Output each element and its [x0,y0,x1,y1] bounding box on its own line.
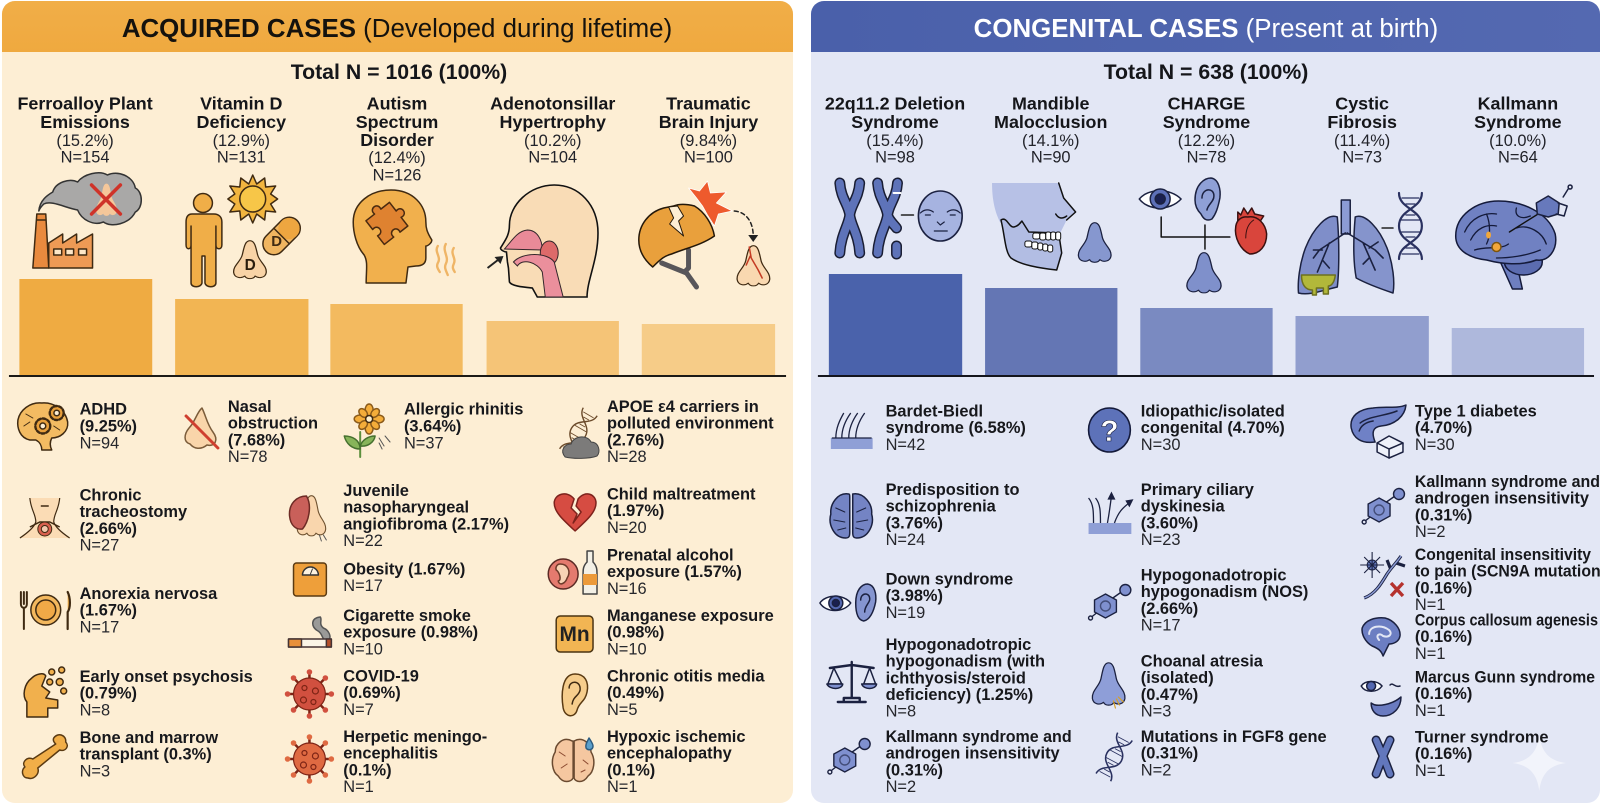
icon: marcus gunn eye and mouth [1361,682,1401,716]
icon: head cross-section with airway [488,185,598,297]
label: kallmann syndrome: N=64 [1498,148,1538,167]
item: prenatal alcohol exposure [607,546,742,598]
header band: congenital [811,1,1600,52]
icon: nose with atresia mark [1092,663,1125,708]
item: allergic rhinitis: Allergic rhinitis [404,400,523,419]
icon: plate with fork and knife [21,592,70,629]
item: hypoxic ischemic encephalopathy: N=1 [607,778,637,796]
item: corpus callosum agenesis: (0.16%) [1415,628,1472,646]
title: congenital cases: CONGENITAL CASES (Present at birth) [974,15,1438,43]
item: kallmann and androgen insensitivity upper: N=2 [1415,523,1445,541]
icon: herpes virus [285,734,334,784]
label: traumatic brain injury: Traumatic [666,93,751,114]
watermark sparkle [1512,735,1566,791]
item: type 1 diabetes: (4.70%) [1415,419,1472,437]
item: hypoxic ischemic encephalopathy [607,728,745,796]
item: kallmann and androgen insensitivity lower: N=2 [886,778,916,796]
item: down syndrome: N=19 [886,604,925,622]
item: predisposition to schizophrenia [886,481,1019,549]
item: herpetic meningo-encephalitis: N=1 [343,778,374,796]
item: predisposition to schizophrenia: schizophrenia [886,498,997,516]
label: mandible malocclusion [994,93,1107,167]
item: early onset psychosis: (0.79%) [80,685,137,703]
item: hypoxic ischemic encephalopathy: encephalopathy [607,745,733,763]
panel: congenital cases [811,1,1600,803]
item: chronic otitis media: N=5 [607,701,637,719]
total: congenital: Total N = 638 (100%) [1104,60,1308,84]
item: obesity: Obesity (1.67%) [343,560,465,579]
label: vitamin d deficiency [197,93,286,167]
item: turner syndrome [1415,728,1549,780]
icon: flower with pollen [344,404,390,457]
item: chronic tracheostomy: Chronic [80,486,142,505]
icon: dna with pollution cloud [560,408,599,458]
label: autism spectrum disorder [356,93,438,185]
item: child maltreatment: Child maltreatment [607,485,756,504]
label: adenotonsillar hypertrophy: (10.2%) [524,132,581,150]
item: juvenile nasopharyngeal angiofibroma: angiofibroma (2.17%) [343,515,509,533]
item: herpetic meningo-encephalitis: Herpetic meningo- [343,728,487,746]
label: kallmann syndrome: (10.0%) [1489,132,1547,150]
item: marcus gunn syndrome [1415,668,1595,720]
label: mandible malocclusion: N=90 [1031,148,1071,167]
congenital panel contents [818,15,1600,796]
item: hypogonadotropic hypogonadism with ichthyosis: ichthyosis/steroid [886,669,1026,687]
item: bardet-biedl syndrome [886,402,1026,454]
bar chart: congenital top five [818,274,1594,377]
item: chronic otitis media [607,667,765,719]
icon: jaw profile and nose [992,183,1111,270]
item: herpetic meningo-encephalitis: encephalitis [343,745,438,763]
icon: person, sun, pill and nose [186,175,305,287]
item: chronic otitis media: Chronic otitis media [607,667,765,686]
item: kallmann and androgen insensitivity upper: androgen insensitivity [1415,490,1590,508]
title: acquired cases: ACQUIRED CASES (Developed during lifetime) [122,15,672,43]
label: cystic fibrosis: Cystic [1335,93,1389,114]
item: chronic otitis media: (0.49%) [607,684,664,702]
icon: factory with smoke cloud and crossed nose [33,173,141,268]
label: charge syndrome: Syndrome [1163,112,1250,132]
item: corpus callosum agenesis [1415,611,1598,663]
icon: question mark circle [1089,408,1130,452]
item: child maltreatment: N=20 [607,519,647,537]
item: type 1 diabetes: Type 1 diabetes [1415,402,1537,421]
label: ferroalloy plant emissions: N=154 [61,148,109,167]
label: traumatic brain injury: N=100 [684,148,733,167]
item: idiopathic isolated congenital: Idiopathic/isolated [1141,402,1285,421]
item: choanal atresia: N=3 [1141,703,1171,721]
item: hypogonadotropic hypogonadism nos: N=17 [1141,617,1180,635]
icon: broken heart [554,494,596,531]
icon: cracked helmet, impact and injured nose [639,181,770,287]
item: type 1 diabetes [1415,402,1537,454]
icon: covid-19 virus [285,669,334,719]
item: hypogonadotropic hypogonadism nos: hypogonadism (NOS) [1141,583,1308,601]
icon: cilia with arrows [1089,493,1132,534]
item: adhd [80,400,137,453]
icon: eye and ear [820,584,876,621]
label: mandible malocclusion: Mandible [1012,93,1090,114]
icon: person, sun, pill and nose: D [245,257,256,274]
label: 22q11.2 deletion syndrome: 22q11.2 Deletion [825,93,965,114]
icon: bone [22,735,67,778]
icon: head with puzzle piece [353,190,455,283]
item: hypoxic ischemic encephalopathy: Hypoxic ischemic [607,728,745,746]
label: 22q11.2 deletion syndrome: N=98 [875,148,915,167]
item: hypogonadotropic hypogonadism with ichthyosis: Hypogonadotropic [886,636,1031,654]
label: 22q11.2 deletion syndrome [825,93,965,167]
total: acquired: Total N = 1016 (100%) [291,60,507,84]
item: bone and marrow transplant: N=3 [80,762,110,780]
item: chronic tracheostomy: N=27 [80,537,119,555]
icon: charge eye, ear, heart, nose [1139,178,1267,293]
item: kallmann and androgen insensitivity upper: (0.31%) [1415,506,1472,524]
item: allergic rhinitis [404,400,523,453]
item: nasal obstruction [228,398,318,466]
item: congenital insensitivity to pain: Congenital insensitivity [1415,546,1592,564]
label: vitamin d deficiency: N=131 [217,148,266,167]
item: bardet-biedl syndrome: N=42 [886,436,925,454]
item: apoe e4 carriers: polluted environment [607,415,774,433]
label: 22q11.2 deletion syndrome: (15.4%) [866,132,924,150]
icon: chromosomes and face [840,183,962,254]
item: bone and marrow transplant: transplant (0.3%) [80,746,212,764]
item: congenital insensitivity to pain: N=1 [1415,596,1445,614]
item: adhd: ADHD [80,400,127,419]
item: hypogonadotropic hypogonadism nos: (2.66%) [1141,600,1198,618]
item: congenital insensitivity to pain [1415,546,1600,614]
icon: lungs with mucus and dna [1298,193,1422,295]
item: primary ciliary dyskinesia: dyskinesia [1141,498,1225,516]
label: traumatic brain injury: Brain Injury [659,112,758,132]
item: primary ciliary dyskinesia: (3.60%) [1141,514,1198,532]
item: apoe e4 carriers: (2.76%) [607,431,664,449]
label: ferroalloy plant emissions: (15.2%) [56,132,114,150]
item: bardet-biedl syndrome: syndrome (6.58%) [886,419,1026,437]
item: nasal obstruction: (7.68%) [228,431,285,449]
icon: manganese tile: Mn [560,623,590,646]
item: mutations in fgf8 gene: Mutations in FGF8 gene [1141,728,1327,746]
item: prenatal alcohol exposure: Prenatal alcohol [607,546,734,565]
label: charge syndrome: (12.2%) [1178,132,1235,150]
icon: ear [562,674,588,716]
item: covid-19: N=7 [343,701,374,719]
item: marcus gunn syndrome: N=1 [1415,702,1445,720]
label: ferroalloy plant emissions [17,93,153,167]
item: juvenile nasopharyngeal angiofibroma: nasopharyngeal [343,499,469,517]
item: hypogonadotropic hypogonadism with ichthyosis [886,636,1045,721]
label: adenotonsillar hypertrophy: N=104 [528,148,577,167]
label: autism spectrum disorder: Spectrum [356,112,438,132]
item: kallmann and androgen insensitivity lower: (0.31%) [886,761,943,779]
icon: brain with gears [18,403,68,450]
item: apoe e4 carriers [607,398,774,466]
item: allergic rhinitis: (3.64%) [404,418,461,436]
item: early onset psychosis [80,668,253,719]
item: turner syndrome: (0.16%) [1415,745,1472,763]
item: manganese exposure [607,607,774,658]
item: predisposition to schizophrenia: Predisposition to [886,481,1019,499]
item: kallmann and androgen insensitivity lower: androgen insensitivity [886,745,1061,763]
item: juvenile nasopharyngeal angiofibroma: Juvenile [343,482,409,500]
label: autism spectrum disorder: Disorder [360,130,434,150]
item: chronic tracheostomy: tracheostomy [80,503,188,521]
item: hypogonadotropic hypogonadism with ichthyosis: hypogonadism (with [886,653,1045,671]
item: juvenile nasopharyngeal angiofibroma: N=22 [343,532,383,550]
item: primary ciliary dyskinesia: N=23 [1141,531,1180,549]
icon: embryo and alcohol bottle [548,551,597,594]
item: kallmann and androgen insensitivity lower: Kallmann syndrome and [886,728,1072,746]
label: charge syndrome: N=78 [1187,148,1226,167]
label: vitamin d deficiency: Vitamin D [200,93,282,114]
item: marcus gunn syndrome: (0.16%) [1415,685,1472,703]
item: nasal obstruction: N=78 [228,448,268,466]
item: hypoxic ischemic encephalopathy: (0.1%) [607,761,655,779]
icon: head with psychosis fragments [24,667,67,717]
icon: pancreas and cube [1351,405,1406,458]
list: acquired other causes [80,398,774,796]
label: kallmann syndrome: Syndrome [1474,112,1562,132]
item: obesity: N=17 [343,577,383,595]
label: ferroalloy plant emissions: Emissions [40,112,130,132]
icon: cigarette with smoke [289,617,331,647]
item: down syndrome [886,570,1013,622]
item: obesity [343,560,465,595]
icon: person, sun, pill and nose: D [271,233,282,250]
item: anorexia nervosa: Anorexia nervosa [80,585,218,603]
item: anorexia nervosa: N=17 [80,618,119,636]
item: cigarette smoke exposure: N=10 [343,640,383,658]
item: choanal atresia: Choanal atresia [1141,652,1264,671]
icon: bathroom scale [294,563,326,596]
item: bone and marrow transplant [80,729,218,780]
item: child maltreatment [607,485,756,537]
item: prenatal alcohol exposure: exposure (1.57%) [607,563,742,581]
item: turner syndrome: N=1 [1415,762,1445,780]
item: apoe e4 carriers: N=28 [607,448,647,466]
item: predisposition to schizophrenia: (3.76%) [886,514,943,532]
item: covid-19: (0.69%) [343,684,401,702]
item: manganese exposure: Manganese exposure [607,607,774,625]
icon: molecule middle [1089,584,1131,620]
item: adhd: N=94 [80,434,119,453]
label: vitamin d deficiency: Deficiency [197,112,286,132]
item: anorexia nervosa [80,585,218,636]
item: hypogonadotropic hypogonadism nos [1141,566,1308,635]
label: autism spectrum disorder: N=126 [373,166,421,185]
item: prenatal alcohol exposure: N=16 [607,580,647,598]
item: covid-19 [343,667,419,719]
item: mutations in fgf8 gene: (0.31%) [1141,745,1198,763]
item: kallmann and androgen insensitivity upper [1415,473,1600,541]
item: allergic rhinitis: N=37 [404,434,444,453]
label: ferroalloy plant emissions: Ferroalloy Plant [17,93,153,114]
item: mutations in fgf8 gene [1141,728,1327,779]
item: cigarette smoke exposure [343,607,478,658]
item: idiopathic isolated congenital [1141,402,1285,454]
item: hypogonadotropic hypogonadism with ichthyosis: N=8 [886,703,916,721]
list: congenital other causes [886,402,1600,796]
icon: brain with water drop [552,738,594,782]
label: 22q11.2 deletion syndrome: Syndrome [851,112,939,132]
icon: manganese tile [556,616,593,652]
item: hypogonadotropic hypogonadism nos: Hypogonadotropic [1141,566,1287,585]
label: kallmann syndrome: Kallmann [1478,93,1558,114]
item: chronic tracheostomy [80,486,188,555]
label: traumatic brain injury: (9.84%) [680,132,737,150]
item: choanal atresia [1141,652,1264,721]
item: kallmann and androgen insensitivity lower [886,728,1072,796]
label: autism spectrum disorder: Autism [367,93,427,114]
item: covid-19: COVID-19 [343,667,419,686]
label: charge syndrome: CHARGE [1168,93,1245,114]
label: adenotonsillar hypertrophy: Hypertrophy [500,112,606,132]
item: adhd: (9.25%) [80,418,137,436]
item: idiopathic isolated congenital: congenital (4.70%) [1141,419,1285,437]
item: idiopathic isolated congenital: N=30 [1141,436,1180,454]
icon: nasal obstruction [185,408,218,448]
item: bardet-biedl syndrome: Bardet-Biedl [886,402,983,421]
icon: brain with molecule [1456,185,1572,289]
label: cystic fibrosis: (11.4%) [1334,132,1390,150]
item: herpetic meningo-encephalitis [343,728,487,796]
item: anorexia nervosa: (1.67%) [80,602,137,620]
item: down syndrome: (3.98%) [886,587,943,605]
item: manganese exposure: N=10 [607,640,647,658]
icon: dna helix [1096,733,1132,781]
item: chronic tracheostomy: (2.66%) [80,520,137,538]
item: apoe e4 carriers: APOE ε4 carriers in [607,398,759,416]
item: herpetic meningo-encephalitis: (0.1%) [343,761,392,779]
label: mandible malocclusion: Malocclusion [994,112,1107,132]
icon: nose with angiofibroma [289,496,326,541]
icon: molecule lower [828,738,870,774]
label: cystic fibrosis: N=73 [1342,148,1382,167]
item: primary ciliary dyskinesia: Primary ciliary [1141,481,1255,499]
item: juvenile nasopharyngeal angiofibroma [343,482,509,550]
label: charge syndrome [1163,93,1250,167]
item: predisposition to schizophrenia: N=24 [886,531,925,549]
label: adenotonsillar hypertrophy [490,93,615,167]
label: traumatic brain injury [659,93,758,167]
header band: acquired [2,1,793,52]
item: nasal obstruction: Nasal [228,398,272,416]
item: type 1 diabetes: N=30 [1415,436,1455,454]
label: vitamin d deficiency: (12.9%) [213,132,270,150]
item: corpus callosum agenesis: N=1 [1415,645,1445,663]
item: turner syndrome: Turner syndrome [1415,728,1549,747]
item: mutations in fgf8 gene: N=2 [1141,761,1171,779]
item: manganese exposure: (0.98%) [607,624,664,642]
item: child maltreatment: (1.97%) [607,502,664,520]
icon: molecule upper [1362,488,1404,524]
item: early onset psychosis: Early onset psychosis [80,668,253,686]
label: adenotonsillar hypertrophy: Adenotonsillar [490,93,615,114]
item: marcus gunn syndrome: Marcus Gunn syndrome [1415,668,1595,687]
icon: balance scale [827,662,877,702]
label: cystic fibrosis [1327,93,1397,167]
bar chart: acquired top five [9,279,786,377]
icon: turner chromosome [1376,740,1390,774]
item: down syndrome: Down syndrome [886,570,1013,589]
item: early onset psychosis: N=8 [80,701,110,719]
item: hypogonadotropic hypogonadism with ichthyosis: deficiency) (1.25%) [886,686,1033,704]
icon: question mark circle: ? [1100,415,1119,448]
icon: nerve with red x [1360,552,1405,598]
item: cigarette smoke exposure: exposure (0.98%) [343,624,478,642]
item: nasal obstruction: obstruction [228,415,318,433]
label: autism spectrum disorder: (12.4%) [368,149,426,167]
icon: brain top view [830,494,872,538]
label: mandible malocclusion: (14.1%) [1022,132,1079,150]
item: choanal atresia: (isolated) [1141,669,1214,687]
item: primary ciliary dyskinesia [1141,481,1255,549]
icon: brain sagittal [1362,618,1400,656]
icon: neck with tracheostomy [20,498,70,538]
item: choanal atresia: (0.47%) [1141,686,1198,704]
label: cystic fibrosis: Fibrosis [1327,112,1397,132]
item: cigarette smoke exposure: Cigarette smoke [343,607,471,625]
panel: acquired cases [2,1,793,803]
item: congenital insensitivity to pain: (0.16%) [1415,579,1472,597]
item: bone and marrow transplant: Bone and marrow [80,729,218,747]
icon: cilia [831,413,873,449]
item: kallmann and androgen insensitivity upper: Kallmann syndrome and [1415,473,1600,491]
label: kallmann syndrome [1474,93,1562,167]
